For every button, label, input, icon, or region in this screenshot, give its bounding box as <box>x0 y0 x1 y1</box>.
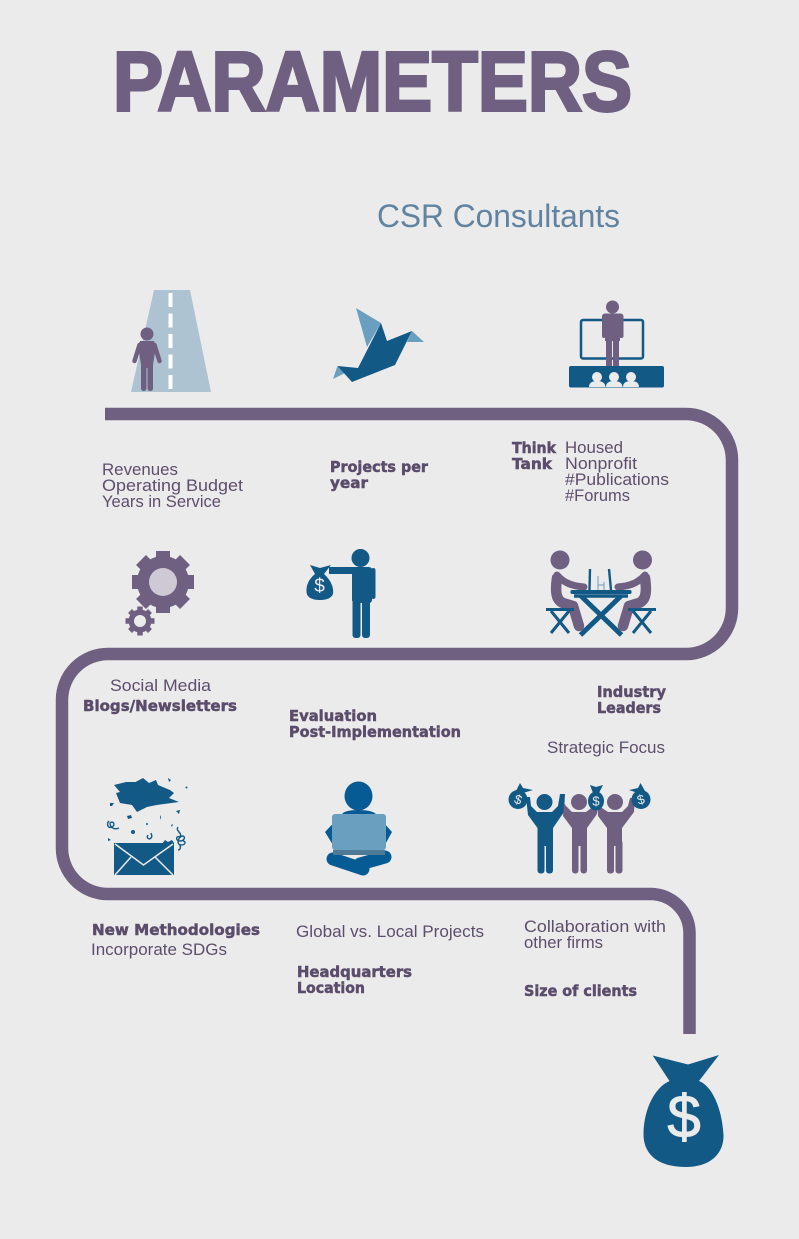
text: global vs local: Global vs. Local Projects <box>296 923 484 941</box>
person: purple right <box>598 794 635 874</box>
icon: large money bag <box>643 1055 724 1167</box>
text: collaboration: other firms <box>524 934 603 952</box>
text: evaluation: Post-Implementation <box>289 723 461 741</box>
icon: exploding envelope <box>108 778 188 875</box>
money bag: right: $ <box>635 791 647 808</box>
text: new methodologies: Incorporate SDGs <box>91 941 227 959</box>
text: revenues: Operating Budget <box>102 477 243 495</box>
money bag: left <box>508 783 533 809</box>
money bag: middle <box>588 785 604 810</box>
text: revenues: Revenues <box>102 461 178 479</box>
text: revenues: Years in Service <box>102 493 221 511</box>
text: industry leaders: Leaders <box>597 699 661 717</box>
subtitle: CSR Consultants <box>377 198 620 234</box>
text: think tank details: Nonprofit <box>565 455 637 473</box>
text: headquarters location <box>297 963 412 997</box>
icon: two people meeting at table <box>546 550 656 635</box>
text: projects per year: Projects per <box>330 458 428 476</box>
icon: three people raising money bags <box>508 783 650 874</box>
icon: presenter on stage <box>569 300 664 388</box>
text: size of clients: Size of clients <box>524 982 637 1000</box>
icon: gears <box>126 551 194 636</box>
text: evaluation <box>289 707 461 741</box>
text: revenues <box>102 461 243 511</box>
text: new methodologies: New Methodologies <box>92 921 260 939</box>
text: think tank <box>512 439 557 473</box>
icon: person holding money bag <box>306 549 376 638</box>
icon: origami bird <box>333 308 424 382</box>
text: industry leaders: Industry <box>597 683 666 701</box>
text: projects per year: year <box>330 474 368 492</box>
text: evaluation: Evaluation <box>289 707 377 725</box>
icon: person holding money bag: $ <box>314 576 325 597</box>
text: social media: Social Media <box>110 677 212 695</box>
text: social media <box>83 677 237 715</box>
text: social media: Blogs/Newsletters <box>83 697 237 715</box>
text: think tank: Think <box>512 439 557 457</box>
text: new methodologies <box>91 921 260 959</box>
text: collaboration <box>524 918 666 952</box>
person: blue <box>526 794 565 874</box>
text: strategic focus: Strategic Focus <box>547 739 665 757</box>
text: headquarters location: Headquarters <box>297 963 412 981</box>
text: think tank: Tank <box>512 455 553 473</box>
text: industry leaders <box>597 683 666 717</box>
text: think tank details: Housed <box>565 439 623 457</box>
winding path <box>62 414 732 1034</box>
person: purple middle <box>563 794 598 874</box>
icon: road with person <box>131 290 211 392</box>
money bag: right <box>629 783 650 809</box>
text: think tank details: #Publications <box>565 471 669 489</box>
money bag: middle: $ <box>592 794 600 808</box>
icon: large money bag: $ <box>667 1083 701 1150</box>
money bag: left: $ <box>512 791 525 808</box>
text: headquarters location: Location <box>297 979 365 997</box>
title: PARAMETERS <box>113 34 632 128</box>
text: think tank details: #Forums <box>565 487 630 505</box>
text: projects per year <box>330 458 428 492</box>
icon: person with laptop <box>325 782 392 869</box>
text: think tank details <box>565 439 669 505</box>
text: collaboration: Collaboration with <box>524 918 666 936</box>
